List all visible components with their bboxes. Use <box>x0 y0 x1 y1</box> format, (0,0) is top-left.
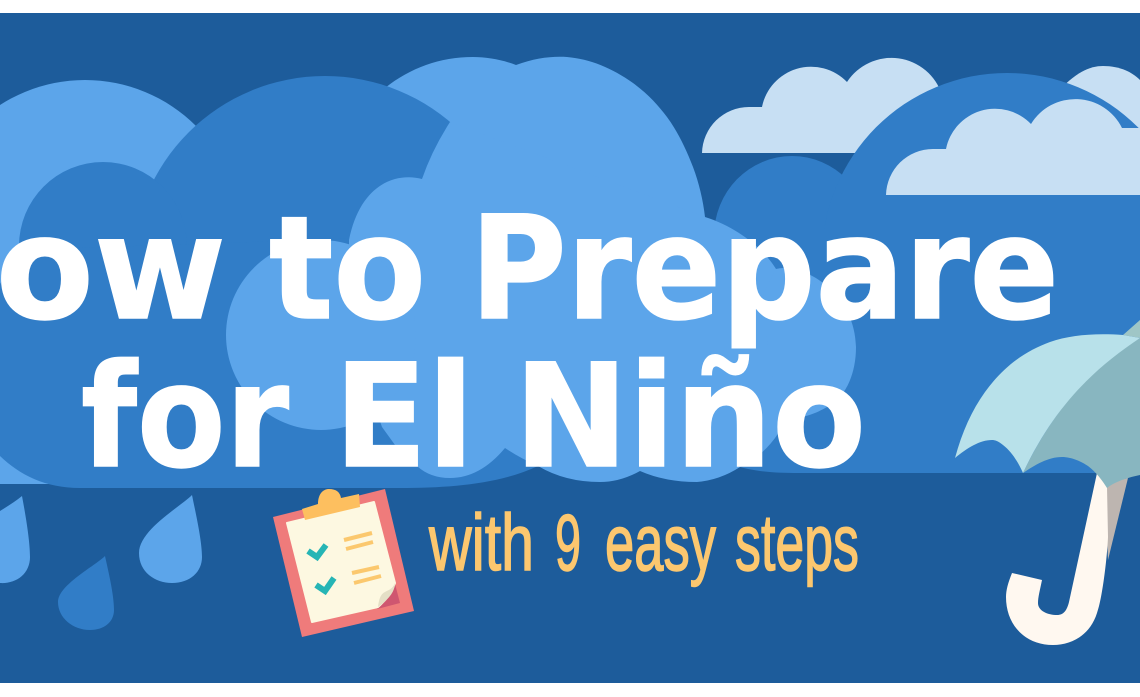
subtitle <box>428 498 859 587</box>
dark corner <box>377 580 400 609</box>
pale foreground cloud <box>886 99 1140 195</box>
umbrella <box>955 320 1140 645</box>
umbrella tip <box>1123 320 1140 338</box>
title: El <box>334 333 474 500</box>
subtitle: easy <box>605 498 716 587</box>
light blue back clouds <box>0 57 705 484</box>
list lines <box>344 533 381 583</box>
umbrella light panel <box>955 334 1140 473</box>
clipboard board <box>273 489 414 637</box>
subtitle: steps <box>735 498 859 587</box>
mid blue cloud mass <box>0 73 1140 488</box>
paper sheet <box>287 502 395 622</box>
subtitle: 9 <box>555 498 581 587</box>
clipboard clip <box>302 489 360 520</box>
title <box>0 185 1059 500</box>
paper curl <box>378 583 395 607</box>
title: Prepare <box>470 185 1059 352</box>
check marks <box>308 545 334 591</box>
pale background clouds <box>702 58 1140 153</box>
subtitle: with <box>428 498 534 587</box>
title: Niño <box>514 333 866 500</box>
light blue foreground clouds <box>226 122 856 482</box>
raindrops <box>0 495 202 630</box>
umbrella dark panel <box>1023 338 1140 488</box>
clipboard icon <box>273 489 414 637</box>
umbrella handle <box>1006 473 1108 645</box>
title: to <box>269 185 426 352</box>
title: for <box>81 333 289 500</box>
umbrella handle shadow <box>1105 478 1128 560</box>
